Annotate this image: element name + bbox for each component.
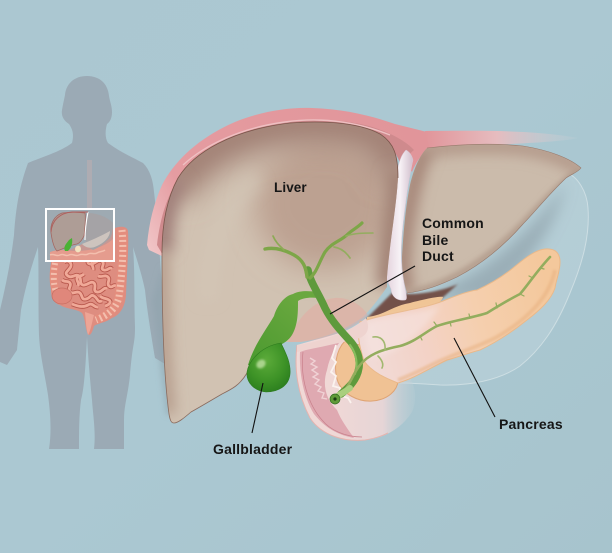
- envelope shading: [420, 182, 566, 300]
- locator box: [46, 209, 114, 261]
- ampulla opening: [330, 388, 350, 404]
- pancreas pale overlap: [365, 306, 440, 358]
- pancreas head: [336, 341, 398, 401]
- esophagus stripe: [87, 160, 92, 210]
- leader line: common bile duct: [330, 266, 415, 314]
- mini liver right lobe: [51, 212, 85, 251]
- leader line: pancreas: [454, 338, 495, 417]
- pink stomach overlay on liver: [288, 298, 368, 342]
- liver right lobe: [162, 122, 398, 423]
- label: common bile duct: Common: [422, 215, 484, 231]
- common bile duct and hepatic branches: [265, 223, 373, 394]
- liver shaded centre: [255, 140, 395, 270]
- mini liver left lobe: [85, 213, 113, 250]
- mini gallbladder: [64, 238, 72, 251]
- mini diaphragm: [51, 212, 88, 232]
- liver lighter band: [208, 178, 258, 300]
- pancreatic duct: [345, 257, 550, 390]
- mini ligament: [85, 212, 88, 240]
- mini intestine top: [50, 238, 114, 260]
- icon: intestines: [51, 227, 128, 335]
- diaphragm right extension: [425, 131, 578, 149]
- label: pancreas: Pancreas: [499, 416, 563, 432]
- translucent peritoneum envelope: [400, 172, 588, 385]
- mini head of pancreas: [75, 246, 81, 252]
- pink fold by duodenum: [297, 318, 368, 352]
- stomach shadow strip under liver: [365, 284, 458, 322]
- gallbladder: [247, 291, 318, 392]
- label: gallbladder: Gallbladder: [213, 441, 293, 457]
- pancreas body and tail: [358, 249, 560, 383]
- white mucosa edge: [331, 345, 351, 403]
- duodenum: [296, 330, 415, 440]
- diaphragm highlight: [183, 120, 390, 165]
- ligament: [377, 150, 413, 300]
- mini pancreas: [82, 231, 110, 248]
- gallbladder highlight: [255, 358, 267, 370]
- pancreas lobular shading: [398, 270, 555, 380]
- shadow beside liver: [152, 265, 172, 415]
- human silhouette: [0, 76, 165, 449]
- label: common bile duct: Bile: [422, 232, 448, 248]
- colon: [96, 230, 123, 320]
- diaphragm: [147, 108, 436, 257]
- orange pancreas top strip: [367, 297, 443, 320]
- label: common bile duct: Duct: [422, 248, 454, 264]
- diaphragm inner band: [157, 120, 414, 257]
- duodenal mucosa: [300, 336, 354, 438]
- leader line: gallbladder: [252, 383, 263, 433]
- label: liver: Liver: [274, 180, 307, 195]
- liver left lobe: [402, 144, 581, 293]
